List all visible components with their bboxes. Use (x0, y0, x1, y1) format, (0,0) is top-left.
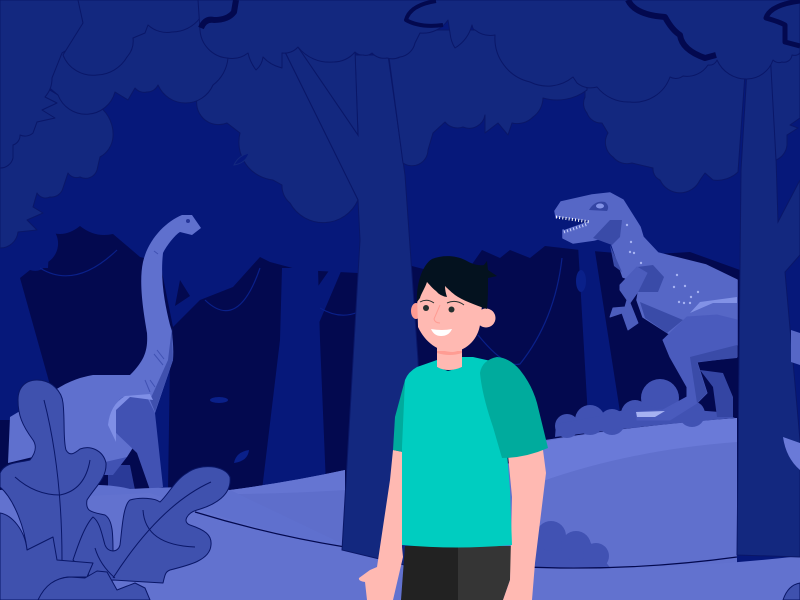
shirt sleeve: near side (393, 380, 405, 452)
hair (417, 256, 497, 309)
tree trunk: centre (283, 47, 425, 570)
t-rex tail piece (791, 330, 800, 365)
front leg shadow (108, 465, 135, 490)
leg shade (690, 345, 737, 403)
front ground (0, 493, 800, 600)
t-rex (555, 193, 737, 420)
body, neck and head (555, 193, 737, 345)
ground (0, 485, 800, 600)
falling leaves (210, 270, 586, 463)
eye (186, 219, 190, 223)
centre hanging lobe (388, 30, 587, 166)
second top lobe (63, 0, 203, 75)
neck shadow (437, 351, 462, 355)
open mouth (558, 217, 589, 230)
face (417, 270, 482, 352)
eyebrows (420, 300, 464, 305)
throat shade (610, 245, 622, 272)
canopy: left lobes (0, 0, 228, 248)
thigh highlight (690, 297, 737, 313)
shirt sleeve: far side (480, 357, 548, 458)
right hanging lobe (584, 60, 746, 193)
arm (610, 267, 647, 330)
branch fork infill (298, 47, 358, 135)
pale leaf at right edge (783, 437, 800, 470)
shoulder highlight (108, 394, 153, 442)
belly shadow (70, 457, 127, 475)
eye (596, 204, 604, 208)
hanging vines (40, 250, 562, 364)
large upright leaf (0, 380, 113, 575)
front leg (113, 397, 163, 490)
canopy: centre and right lobes (197, 30, 800, 223)
upper teeth (556, 217, 590, 222)
jaw shade (593, 220, 622, 245)
trousers (401, 546, 512, 600)
shirt body (402, 357, 512, 548)
left arm (359, 450, 403, 600)
far leg (700, 370, 733, 417)
ground line (195, 512, 737, 568)
body, neck and head (8, 215, 201, 468)
brachiosaurus (8, 215, 201, 490)
large centre-left lobe (197, 30, 358, 223)
thigh and leg (637, 315, 737, 420)
foot highlight (636, 411, 665, 417)
spreading leaf veins (95, 482, 211, 578)
canopy leaf outline (234, 153, 249, 165)
top canopy band (198, 0, 800, 102)
eyes (423, 305, 454, 312)
lower teeth (564, 224, 588, 232)
spreading leaf (73, 467, 230, 583)
foreground plants (0, 380, 800, 600)
bush behind ground (370, 521, 612, 570)
background foliage and trunks (0, 225, 620, 490)
neck wrinkles (145, 251, 164, 392)
neck (437, 346, 462, 370)
tree trunk: right (737, 60, 800, 557)
skin speckles (626, 224, 699, 304)
left ear (411, 303, 421, 319)
lower left leaf (38, 571, 150, 600)
bottom-right bush corner (783, 583, 800, 600)
back hills (195, 417, 737, 570)
far top lobe (40, 0, 228, 114)
belly shade (640, 302, 683, 333)
back left lobe (0, 60, 113, 248)
bush behind the t-rex (555, 379, 735, 438)
right arm (503, 450, 546, 600)
dark gap in branches (175, 280, 190, 306)
dark forest depths (0, 226, 740, 520)
right ear (476, 308, 496, 328)
boy (359, 256, 548, 600)
dark crescents between canopy lobes (201, 0, 800, 58)
large leaf veins (15, 400, 90, 560)
nose (434, 305, 440, 323)
left hill (0, 485, 345, 600)
smile (431, 329, 452, 336)
neck shadow (150, 327, 173, 412)
eye socket (589, 202, 608, 211)
far right lobe (770, 50, 800, 160)
bottom-left bush (0, 513, 93, 600)
front top-left lobe (0, 0, 83, 168)
shoulder shade (637, 265, 664, 292)
